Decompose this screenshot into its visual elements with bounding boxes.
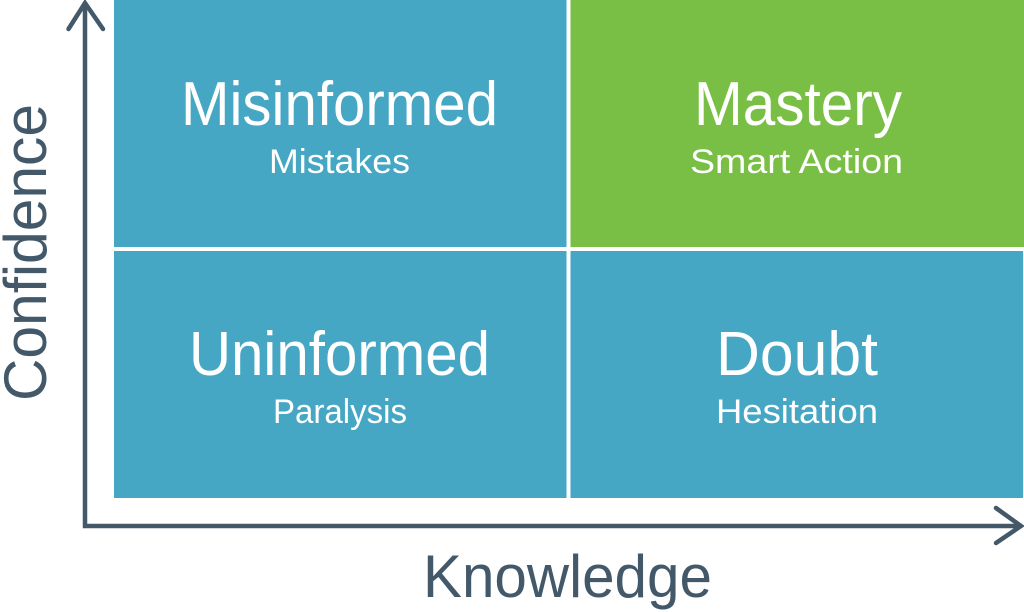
panel: uninformed xyxy=(114,251,566,498)
text: Hesitation: Hesitation xyxy=(716,393,878,431)
heading: Mastery: Mastery xyxy=(694,70,902,139)
text: Smart Action: Smart Action xyxy=(690,143,903,181)
text: Mistakes: Mistakes xyxy=(269,143,410,181)
panel: mastery xyxy=(570,0,1024,247)
heading: Misinformed: Misinformed xyxy=(181,70,498,139)
heading: Uninformed: Uninformed xyxy=(189,320,490,389)
panel: doubt xyxy=(570,251,1023,498)
panel: misinformed xyxy=(114,0,566,247)
axis label: Knowledge: Knowledge xyxy=(423,543,712,610)
heading: Doubt: Doubt xyxy=(716,320,878,389)
text: Paralysis: Paralysis xyxy=(273,393,407,431)
